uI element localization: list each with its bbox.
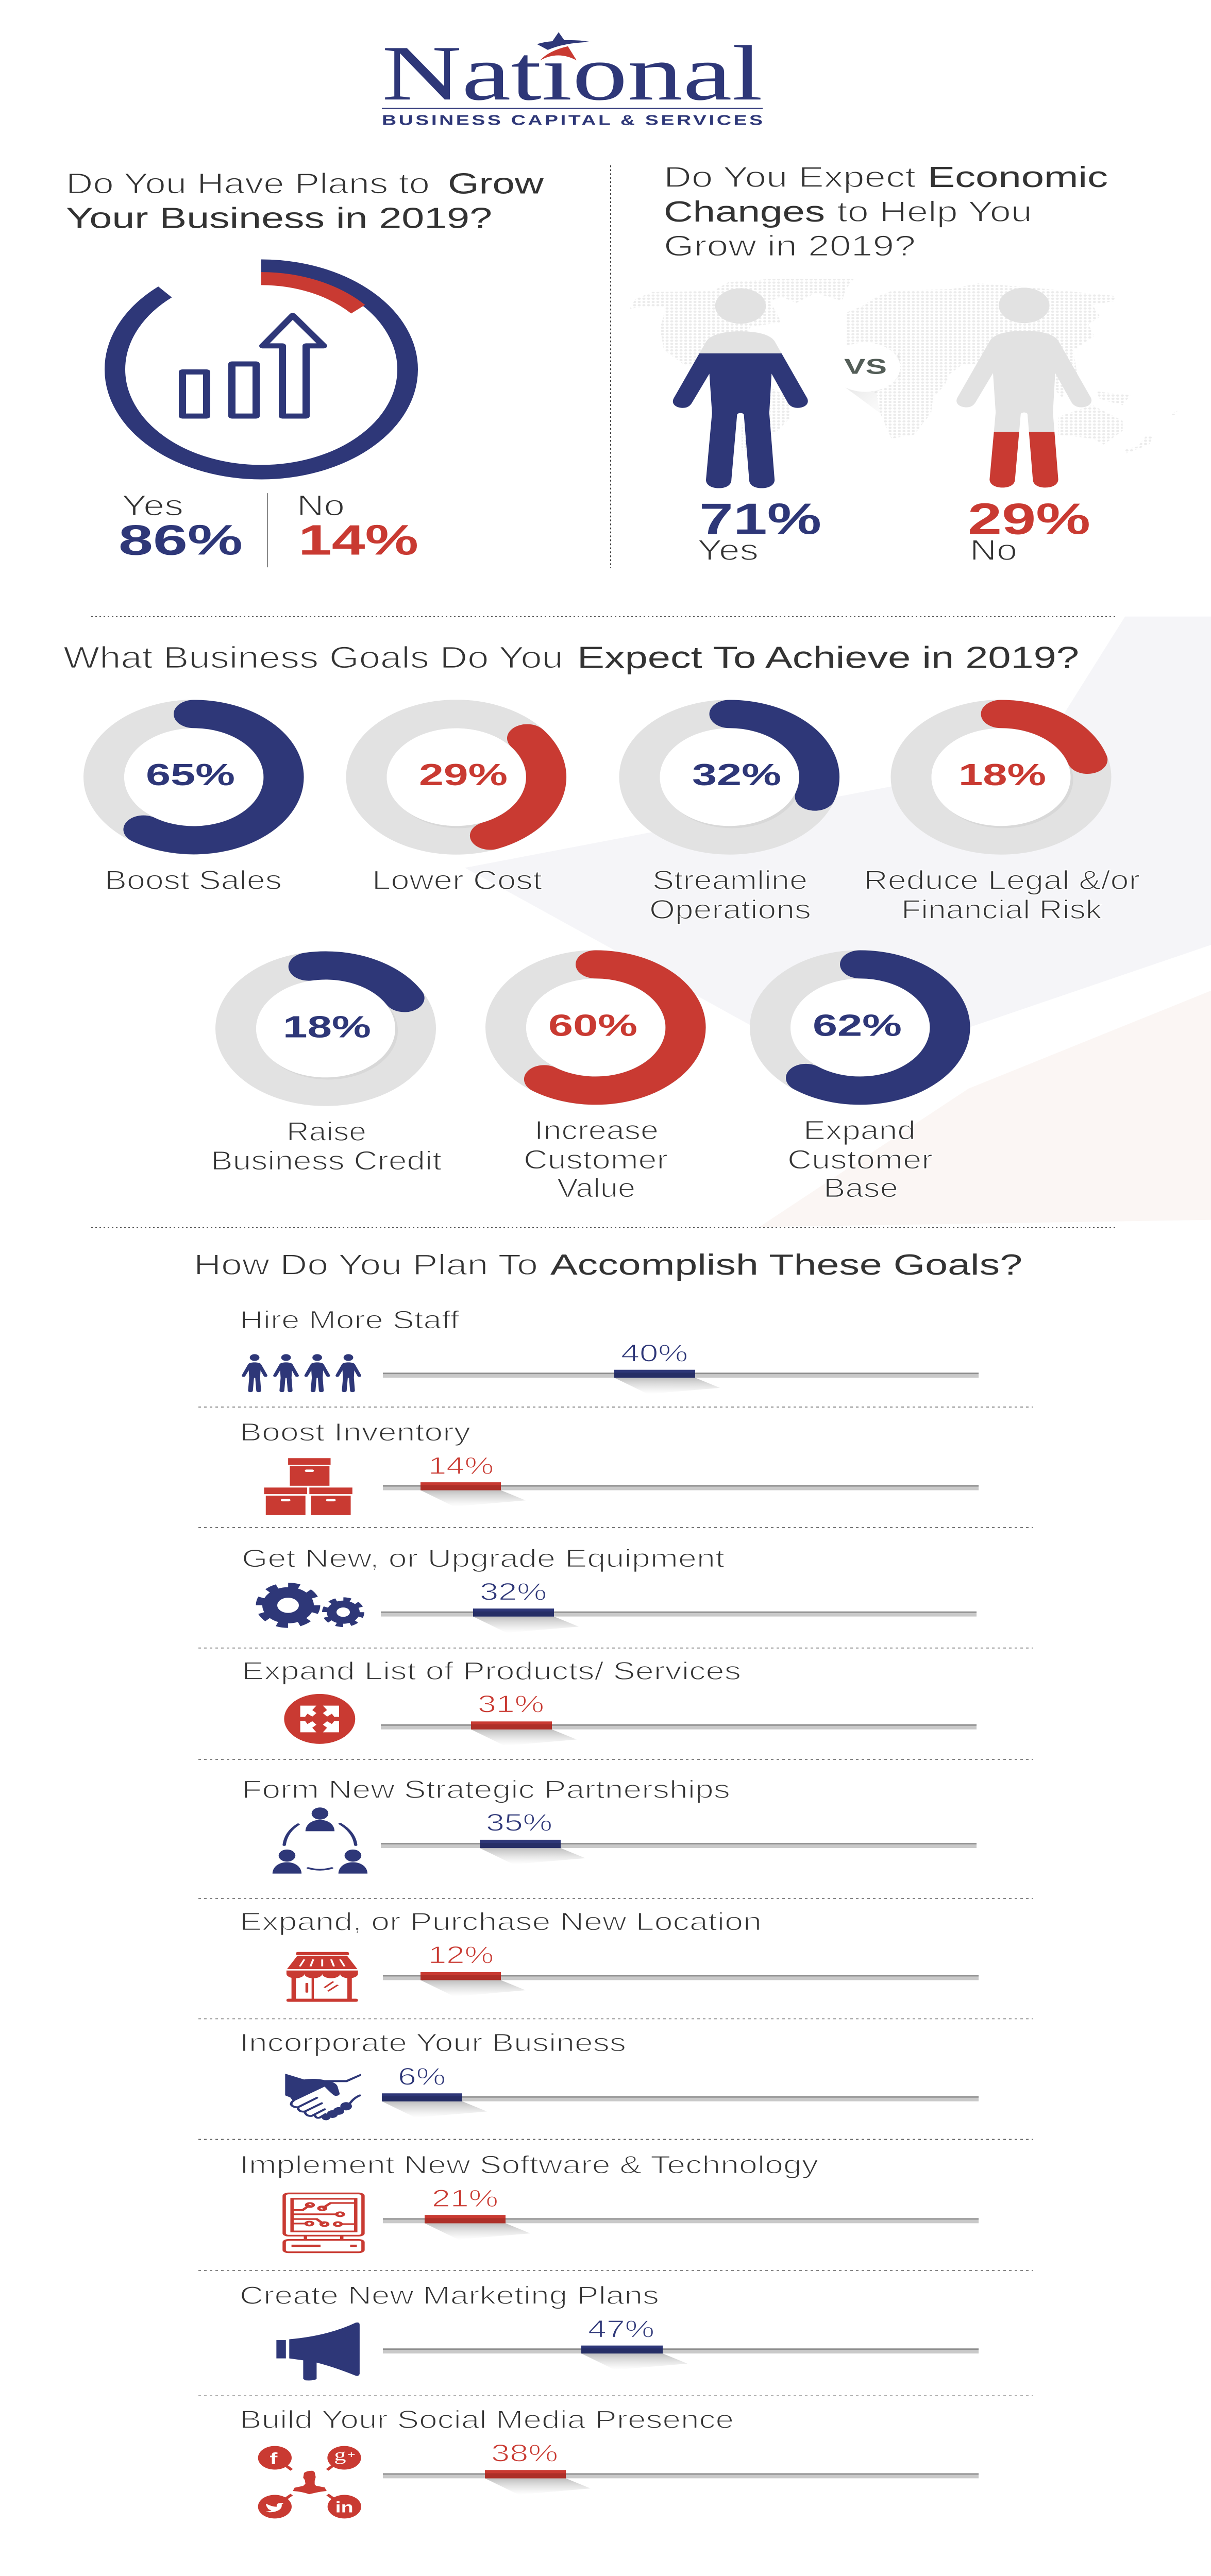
donut: raise business credit 18% <box>211 955 442 1176</box>
logo star <box>537 32 591 61</box>
donut: lower cost 29%: Lower Cost <box>372 865 542 895</box>
bar: 12%: 12% <box>428 1942 494 1969</box>
logo: National Business Capital & Services <box>382 29 763 128</box>
label: 71% yes <box>697 495 821 566</box>
donut: expand customer base 62% <box>770 964 950 1203</box>
label: yes 86%: Yes <box>122 489 183 522</box>
donut: increase customer value 60%: Customer <box>524 1144 668 1175</box>
label: yes 86% <box>119 489 243 564</box>
bar: 40%: 40% <box>621 1340 688 1367</box>
icon: gears <box>260 1586 361 1625</box>
vs badge <box>830 343 901 413</box>
label: Get New, or Upgrade Equipment <box>242 1544 725 1572</box>
label: Hire More Staff <box>240 1306 459 1334</box>
bar: 31% <box>381 1691 977 1745</box>
label: Implement New Software & Technology <box>240 2150 819 2179</box>
donut: streamline operations 32%: Operations <box>649 894 811 924</box>
bar: 6% <box>382 2063 979 2117</box>
donut: boost sales 65%: Boost Sales <box>105 865 282 895</box>
donut: reduce legal risk 18%: 18% <box>958 758 1046 792</box>
donut: streamline operations 32%: Streamline <box>652 865 808 895</box>
icon: social network around a person: + <box>347 2449 356 2460</box>
label: no 14%: 14% <box>298 516 418 564</box>
icon: circuit monitor <box>284 2193 363 2252</box>
row: hire more staff 40% <box>240 1306 979 1394</box>
donut: streamline operations 32% <box>640 714 819 924</box>
label: Build Your Social Media Presence <box>240 2405 734 2433</box>
bar: 35%: 35% <box>486 1809 552 1836</box>
bar: 35% <box>381 1809 977 1865</box>
donut: expand customer base 62%: Base <box>823 1173 898 1203</box>
icon: stacked boxes <box>264 1458 352 1515</box>
panel: economic changes <box>630 161 1178 566</box>
label: Create New Marketing Plans <box>240 2281 659 2309</box>
background shape: pink tint <box>759 991 1211 1227</box>
heading: accomplish goals: How Do You Plan To <box>194 1248 538 1281</box>
label: Expand, or Purchase New Location <box>240 1907 762 1936</box>
row: upgrade equipment 32% <box>242 1544 977 1633</box>
label: Incorporate Your Business <box>240 2028 626 2057</box>
label: 29% no: No <box>970 534 1017 566</box>
heading: grow business <box>66 167 544 234</box>
donut: boost sales 65% <box>104 714 283 895</box>
donut: reduce legal risk 18%: Reduce Legal &/or <box>864 865 1140 895</box>
heading: economic changes <box>664 161 1108 262</box>
heading: accomplish goals: Accomplish These Goals? <box>550 1248 1022 1281</box>
label: 29% no: 29% <box>968 495 1090 544</box>
heading: economic changes: Economic <box>928 161 1108 193</box>
label: Form New Strategic Partnerships <box>242 1775 730 1804</box>
bar: 6%: 6% <box>398 2063 446 2090</box>
icon: social network around a person <box>258 2445 361 2518</box>
dotted world map <box>630 279 1178 453</box>
row: software and technology 21% <box>240 2150 979 2252</box>
donut: lower cost 29% <box>330 688 582 895</box>
heading: accomplish goals <box>194 1248 1022 1281</box>
label: yes 86%: 86% <box>119 516 243 564</box>
label: Boost Inventory <box>240 1418 471 1446</box>
bar: 31%: 31% <box>478 1691 544 1718</box>
icon: handshake <box>285 2074 361 2120</box>
bar: 21%: 21% <box>432 2185 498 2212</box>
bar: 32% <box>381 1579 977 1633</box>
icon: social network around a person: f <box>270 2450 278 2468</box>
bar: 47% <box>383 2316 979 2370</box>
heading: economic changes: Do You Expect <box>664 161 916 193</box>
heading: economic changes: to Help You <box>837 195 1032 228</box>
donut: increase customer value 60% <box>506 964 685 1203</box>
donut: raise business credit 18%: Raise <box>287 1116 366 1147</box>
donut: streamline operations 32%: 32% <box>692 758 781 792</box>
background shape: grey tint <box>465 617 1211 1039</box>
row: expand products 31% <box>242 1656 977 1745</box>
bar: 38%: 38% <box>491 2440 558 2467</box>
donut: raise business credit 18%: 18% <box>283 1010 371 1044</box>
donut: increase customer value 60%: 60% <box>548 1009 637 1043</box>
row: marketing plans 47% <box>240 2281 979 2380</box>
icon: social network around a person: in <box>335 2499 354 2516</box>
heading: economic changes: Changes <box>664 195 825 228</box>
row: strategic partnerships 35% <box>242 1775 977 1874</box>
bar: 38% <box>383 2440 979 2495</box>
donut: expand customer base 62%: Customer <box>787 1144 933 1175</box>
donut: raise business credit 18%: Business Credit <box>211 1145 442 1176</box>
heading: grow business: Grow <box>448 167 544 200</box>
bar: 40% <box>383 1340 979 1394</box>
icon: four people <box>242 1354 361 1392</box>
label: 71% yes: Yes <box>697 534 759 566</box>
panel: business goals <box>63 641 1140 1203</box>
donut: reduce legal risk 18%: Financial Risk <box>901 894 1102 924</box>
donut: reduce legal risk 18% <box>864 714 1140 924</box>
icon: rising bars with arrow <box>182 315 324 416</box>
logo wordmark: National <box>382 29 763 116</box>
label: 71% yes: 71% <box>699 495 821 544</box>
icon: social network around a person: g <box>334 2445 346 2464</box>
label: no 14% <box>297 489 418 564</box>
heading: grow business: Your Business in 2019? <box>66 201 492 234</box>
icon: storefront <box>287 1952 358 2002</box>
figure: 29% no <box>956 287 1091 487</box>
bar: 47%: 47% <box>588 2316 654 2343</box>
label: no 14%: No <box>297 489 345 522</box>
bar: 32%: 32% <box>480 1579 547 1605</box>
donut: expand customer base 62%: Expand <box>803 1115 916 1145</box>
bar: 12% <box>383 1942 979 1996</box>
row: incorporate 6% <box>240 2028 979 2120</box>
figure: 71% yes <box>673 289 808 488</box>
donut: lower cost 29%: 29% <box>419 758 508 792</box>
logo rule <box>382 108 763 109</box>
panel: grow your business <box>66 167 544 567</box>
donut: increase customer value 60%: Increase <box>534 1115 659 1145</box>
bar: 14% <box>383 1453 979 1506</box>
donut: expand customer base 62%: 62% <box>813 1009 902 1043</box>
row: boost inventory 14% <box>240 1418 979 1515</box>
heading: business goals: What Business Goals Do You <box>63 641 563 674</box>
label: 29% no <box>968 495 1090 566</box>
heading: economic changes: Grow in 2019? <box>664 229 916 262</box>
icon: megaphone <box>276 2323 360 2380</box>
logo tagline: BUSINESS CAPITAL & SERVICES <box>382 113 763 128</box>
heading: business goals <box>63 641 1079 674</box>
bar: 14%: 14% <box>428 1453 494 1480</box>
row: social media 38% <box>240 2405 979 2518</box>
vs badge: VS <box>844 354 887 378</box>
bar: 21% <box>383 2185 979 2240</box>
row: new location 12% <box>240 1907 979 2002</box>
icon: three connected people <box>273 1807 367 1874</box>
donut: boost sales 65%: 65% <box>146 758 235 792</box>
donut: increase customer value 60%: Value <box>557 1173 635 1203</box>
label: Expand List of Products/ Services <box>242 1656 741 1685</box>
ring chart: 86% yes, 14% no <box>115 267 408 472</box>
icon: expand arrows in circle <box>284 1694 355 1744</box>
heading: business goals: Expect To Achieve in 2019? <box>577 641 1079 674</box>
heading: grow business: Do You Have Plans to <box>66 167 430 200</box>
